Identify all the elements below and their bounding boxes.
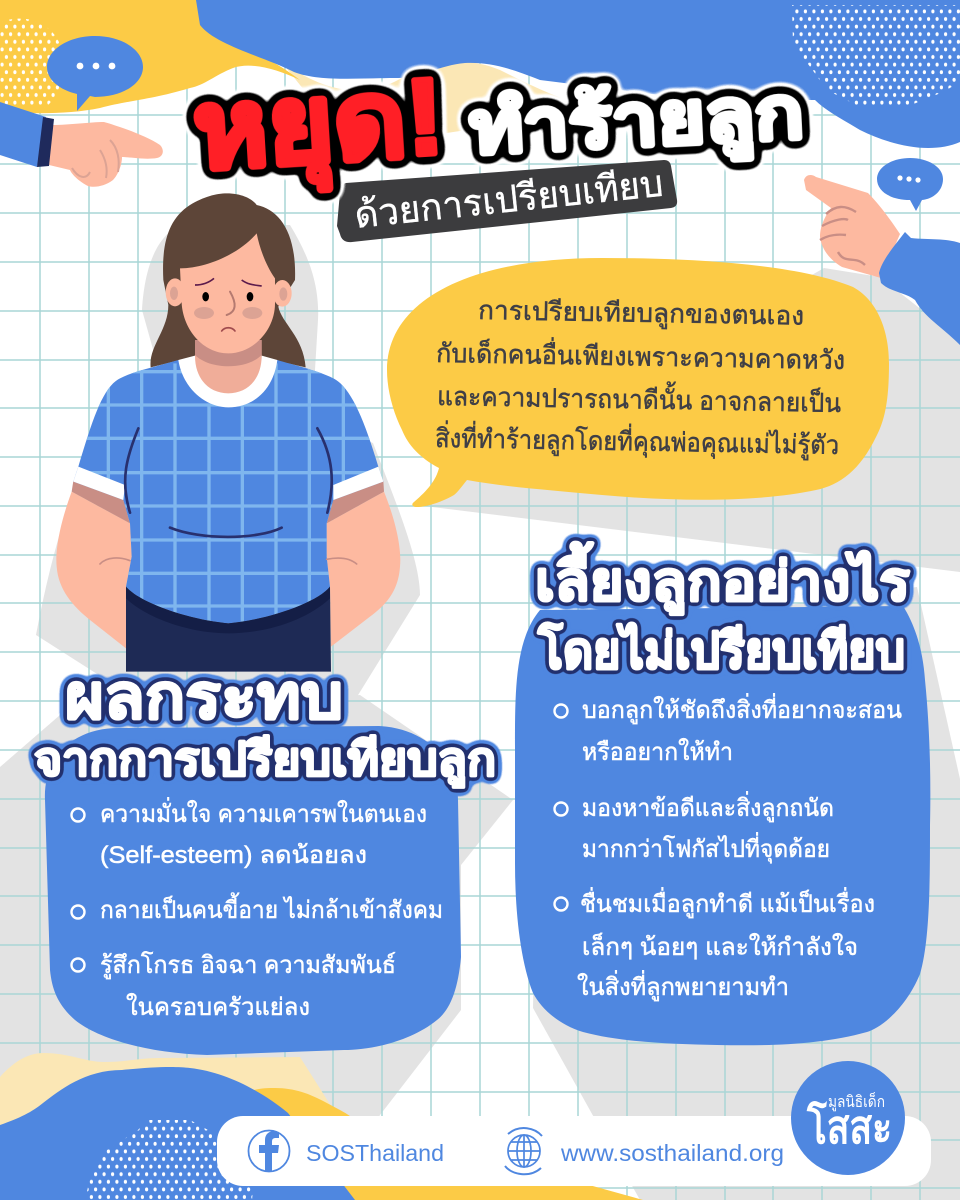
halftone: top right (792, 5, 960, 107)
arm shadows under sleeves (72, 481, 384, 523)
ears (166, 278, 292, 307)
icon: right pointing hand (804, 175, 960, 345)
blob: blue top (196, 0, 960, 148)
list: effects: ในครอบครัวแย่ลง (126, 993, 310, 1021)
panel: effects of comparison (34, 663, 496, 1055)
heading: how to raise: เลี้ยงลูกอย่างไร (535, 542, 910, 615)
intro text: และความปรารถนาดีนั้น อาจกลายเป็น (437, 377, 842, 418)
list: advice: เล็กๆ น้อยๆ และให้กำลังใจ (582, 932, 858, 961)
heading: effects: ผลกระทบ (65, 663, 343, 732)
list: advice: บอกลูกให้ชัดถึงสิ่งที่อยากจะสอน (582, 693, 902, 725)
halftone: top left (0, 19, 63, 108)
title: hurting children: ทำร้ายลูก (468, 73, 806, 174)
intro text (435, 295, 845, 461)
list: effects: รู้สึกโกรธ อิจฉา ความสัมพันธ์ (100, 951, 396, 980)
blob: light yellow bottom left (0, 1053, 343, 1200)
shirt (73, 360, 383, 623)
blob: light yellow behind title (280, 60, 600, 140)
heading: without comparing: โดยไม่เปรียบเทียบ (537, 621, 905, 679)
blob: blue bottom left (0, 1067, 355, 1200)
speech bubble: intro panel (387, 258, 889, 507)
hair (150, 193, 306, 367)
list: advice: มากกว่าโฟกัสไปที่จุดด้อย (582, 832, 830, 864)
text: website: www.sosthailand.org (560, 1140, 784, 1166)
logo: SOS foundation: มูลนิธิเด็ก (828, 1091, 885, 1112)
neck and collar (178, 340, 277, 407)
arms (56, 492, 400, 648)
logo: SOS foundation: โสสะ (806, 1100, 892, 1153)
icon: globe (505, 1128, 542, 1174)
halftone: bottom left (85, 1120, 255, 1200)
intro text: กับเด็กคนอื่นเพียงเพราะความคาดหวัง (436, 335, 845, 375)
panel: how to raise without comparing (515, 542, 930, 1045)
list: effects: กลายเป็นคนขี้อาย ไม่กล้าเข้าสังคม (100, 892, 443, 924)
face (180, 233, 275, 353)
arm creases (100, 558, 357, 564)
logo: SOS foundation (791, 1061, 905, 1175)
blob: yellow bottom (254, 1088, 643, 1200)
list: advice: ในสิ่งที่ลูกพยายามทำ (577, 970, 789, 1002)
skirt (126, 587, 331, 672)
heading: from comparing children: จากการเปรียบเทียบลูก (34, 733, 496, 788)
icon: facebook (248, 1130, 290, 1172)
title: stop: หยุด! (190, 55, 447, 199)
list: advice: ชื่นชมเมื่อลูกทำดี แม้เป็นเรื่อง (580, 887, 875, 919)
list: effects: (Self-esteem) ลดน้อยลง (100, 842, 367, 869)
blob: yellow top left (0, 0, 300, 113)
footer: contact bar (217, 1116, 931, 1186)
list: advice: มองหาข้อดีและสิ่งลูกถนัด (582, 791, 834, 823)
speech bubble: top right (877, 158, 943, 211)
list: advice (554, 693, 902, 1002)
list: effects (72, 797, 443, 1021)
subtitle tag: ด้วยการเปรียบเทียบ (353, 163, 665, 236)
list: advice: หรืออยากให้ทำ (582, 738, 733, 766)
speech bubble: top left (47, 36, 143, 111)
illustration: sad woman (56, 193, 400, 672)
text: facebook name: SOSThailand (306, 1140, 444, 1166)
intro text: การเปรียบเทียบลูกของตนเอง (478, 295, 804, 332)
list: effects: ความมั่นใจ ความเคารพในตนเอง (100, 797, 427, 828)
icon: left pointing hand (0, 102, 163, 187)
intro text: สิ่งที่ทำร้ายลูกโดยที่คุณพ่อคุณแม่ไม่รู้ตัว (435, 420, 839, 461)
